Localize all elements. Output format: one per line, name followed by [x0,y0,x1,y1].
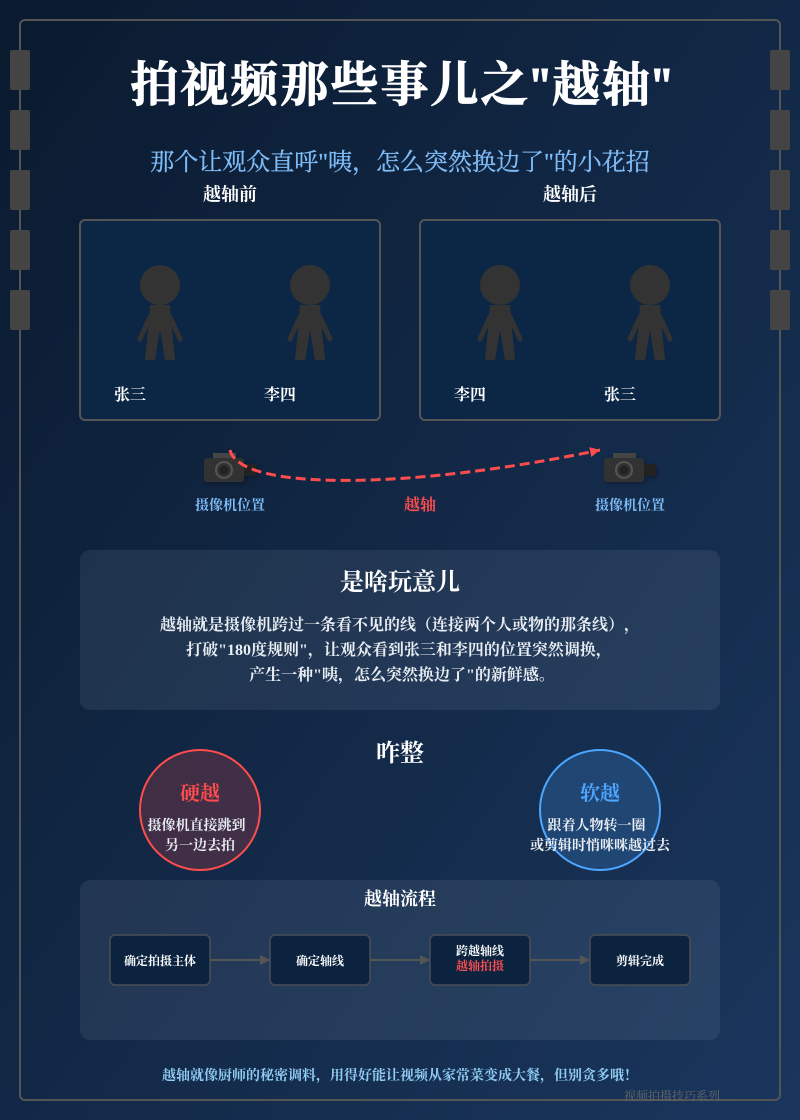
explanation text [160,615,640,685]
description: soft crossing: 或剪辑时悄咪咪越过去 [530,837,671,854]
step 4: 剪辑完成 [616,953,664,968]
label: crossing: 越轴 [404,495,436,514]
figure: Zhang San [630,265,670,360]
panel: crossing process [80,880,720,1040]
label: Li Si: 李四 [454,385,486,404]
description: hard crossing: 另一边去拍 [165,837,235,854]
panel box: after [420,220,720,420]
subtitle: 那个让观众直呼"咦，怎么突然换边了"的小花招 [150,149,650,176]
heading: process: 越轴流程 [364,888,436,909]
circle: soft crossing [530,750,671,870]
explanation text: 打破"180度规则"，让观众看到张三和李四的位置突然调换， [186,640,612,660]
step 1 [110,935,210,985]
step 4 [590,935,690,985]
step 3: 跨越轴线 [456,943,504,958]
panel: after crossing [420,184,720,420]
label: camera position left: 摄像机位置 [195,497,265,514]
heading: after: 越轴后 [543,184,597,204]
footer note: 越轴就像厨师的秘密调料，用得好能让视频从家常菜变成大餐，但别贪多哦！ [162,1067,638,1084]
label: Zhang San: 张三 [114,386,146,404]
step 1: 确定拍摄主体 [124,953,196,968]
panel: before crossing [80,184,380,420]
icon: left camera [204,453,256,482]
circle: hard crossing [140,750,260,870]
step 2 [270,935,370,985]
heading: before: 越轴前 [203,184,257,204]
description: hard crossing [148,817,246,854]
label: camera position right: 摄像机位置 [595,497,665,514]
label: Zhang San: 张三 [604,386,636,404]
panel: what is it [80,550,720,710]
arrow 3 [530,959,590,961]
arrow 1 [210,959,270,961]
figure: Li Si [290,265,330,360]
figure: Li Si [480,265,520,360]
figure: Zhang San [140,265,180,360]
description: hard crossing: 摄像机直接跳到 [148,817,246,834]
heading: hard crossing: 硬越 [180,782,220,805]
icon: right camera [604,453,656,482]
explanation text: 越轴就是摄像机跨过一条看不见的线（连接两个人或物的那条线）， [160,615,640,635]
panel box: before [80,220,380,420]
watermark: 视频拍摄技巧系列 [624,1088,720,1103]
arrow 2 [370,959,430,961]
step 3: 越轴拍摄 [456,958,504,973]
description: soft crossing [530,817,671,854]
label: Li Si: 李四 [264,385,296,404]
step 2: 确定轴线 [296,953,344,968]
step 3 [430,935,530,985]
heading: soft crossing: 软越 [580,782,620,805]
description: soft crossing: 跟着人物转一圈 [548,817,646,834]
title: 拍视频那些事儿之"越轴" [130,59,674,112]
arrow: axis crossing path [230,450,600,480]
explanation text: 产生一种"咦，怎么突然换边了"的新鲜感。 [249,665,555,685]
heading: how to: 咋整 [376,740,424,767]
heading: what is it: 是啥玩意儿 [340,568,460,596]
